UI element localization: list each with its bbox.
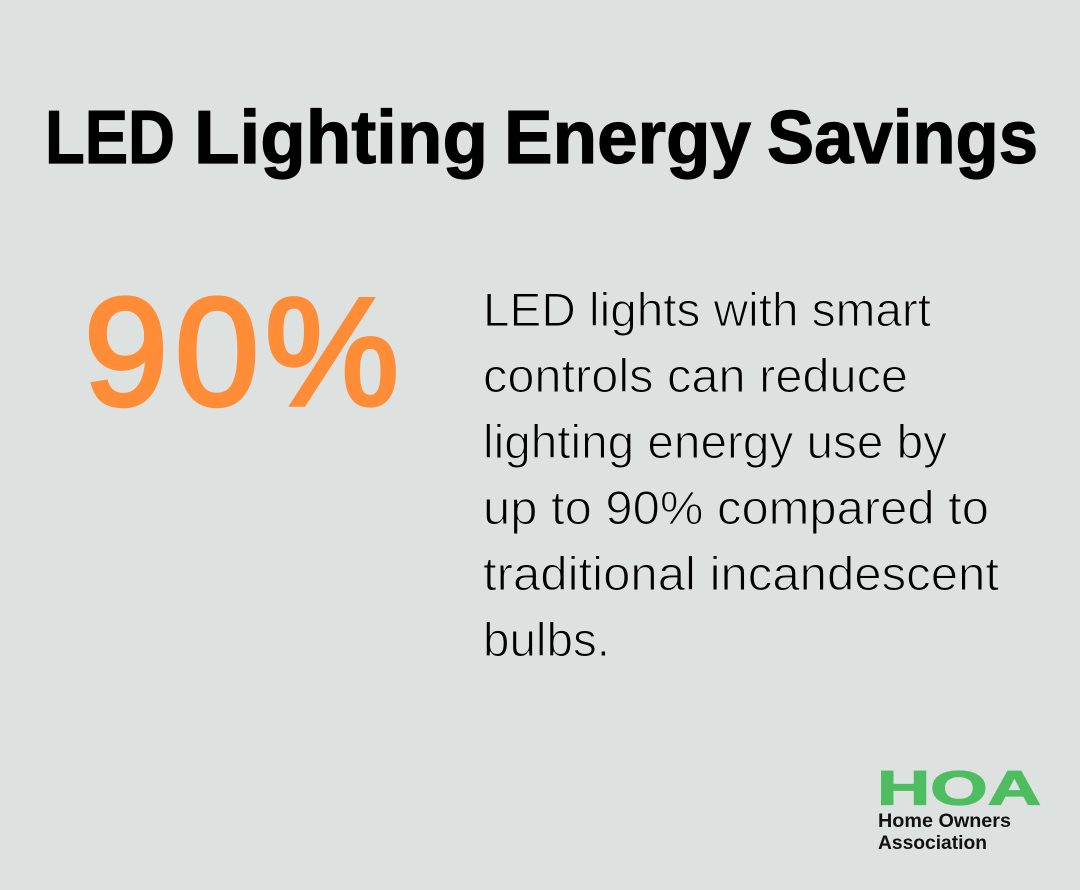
title: Energy <box>504 95 751 179</box>
description text block: LED lights with smart <box>483 283 931 336</box>
big statistic: 90% <box>84 266 399 438</box>
big statistic: 90%: 9 <box>84 266 168 438</box>
description text block: traditional incandescent <box>483 547 999 600</box>
logo: HOA Home Owners Association <box>877 762 1041 854</box>
title: Lighting <box>194 95 488 179</box>
description text block: lighting energy use by <box>483 415 947 468</box>
logo subtitle line 1: Home Owners <box>878 811 1011 832</box>
big statistic: 90%: 0 <box>175 266 259 438</box>
description text block: up to 90% compared to <box>483 481 989 534</box>
description text block <box>483 283 999 666</box>
logo subtitle line 2: Association <box>878 833 987 854</box>
description text block: bulbs. <box>483 613 610 666</box>
title: Savings <box>767 95 1038 179</box>
title <box>45 95 1038 179</box>
description text block: controls can reduce <box>483 349 908 402</box>
title: LED <box>45 95 175 179</box>
logo wordmark: HOA <box>877 762 1041 816</box>
big statistic: 90%: % <box>265 266 399 438</box>
